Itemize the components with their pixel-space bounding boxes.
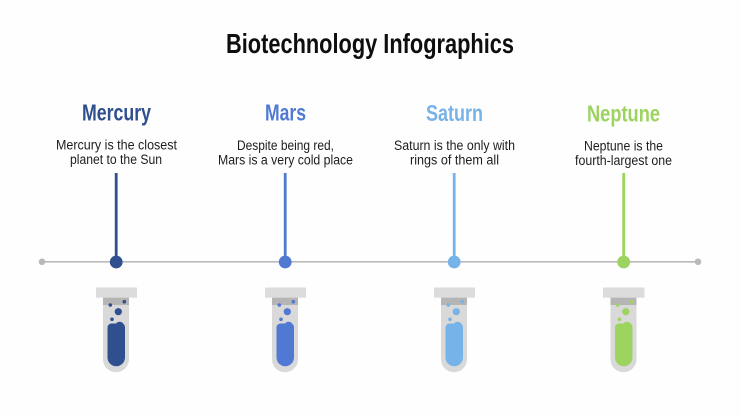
description: Mercury: [56, 138, 177, 167]
stem and marker: Neptune: [617, 173, 630, 268]
column: Mercury: [56, 100, 177, 372]
description: Saturn: [394, 138, 515, 168]
description: Neptune: Neptune is the: [584, 138, 663, 154]
stem and marker: Mercury: [110, 173, 123, 268]
description: Saturn: Saturn is the only with: [394, 138, 515, 153]
description: Mercury: planet to the Sun: [70, 152, 162, 167]
description: Neptune: fourth-largest one: [575, 153, 672, 168]
heading: Neptune: Neptune: [587, 100, 660, 126]
heading: Mars: Mars: [265, 100, 306, 126]
heading: Saturn: Saturn: [426, 100, 483, 126]
description: Neptune: [575, 138, 672, 168]
column: Saturn: [394, 100, 515, 372]
title: Biotechnology Infographics: [226, 28, 514, 59]
description: Mars: Mars is a very cold place: [218, 152, 353, 168]
icon: test tube Mars: [265, 288, 306, 372]
stem and marker: Mars: [279, 173, 292, 268]
icon: test tube Mercury: [96, 288, 137, 372]
stem and marker: Saturn: [448, 173, 461, 268]
description: Mars: [218, 138, 353, 168]
heading: Mercury: Mercury: [82, 100, 151, 126]
description: Saturn: rings of them all: [410, 152, 499, 168]
column: Mars: [218, 100, 353, 372]
icon: test tube Saturn: [434, 288, 475, 372]
description: Mercury: Mercury is the closest: [56, 138, 177, 152]
icon: test tube Neptune: [603, 288, 644, 372]
column: Neptune: [575, 100, 672, 372]
timeline axis: [39, 258, 701, 265]
description: Mars: Despite being red,: [237, 138, 334, 153]
